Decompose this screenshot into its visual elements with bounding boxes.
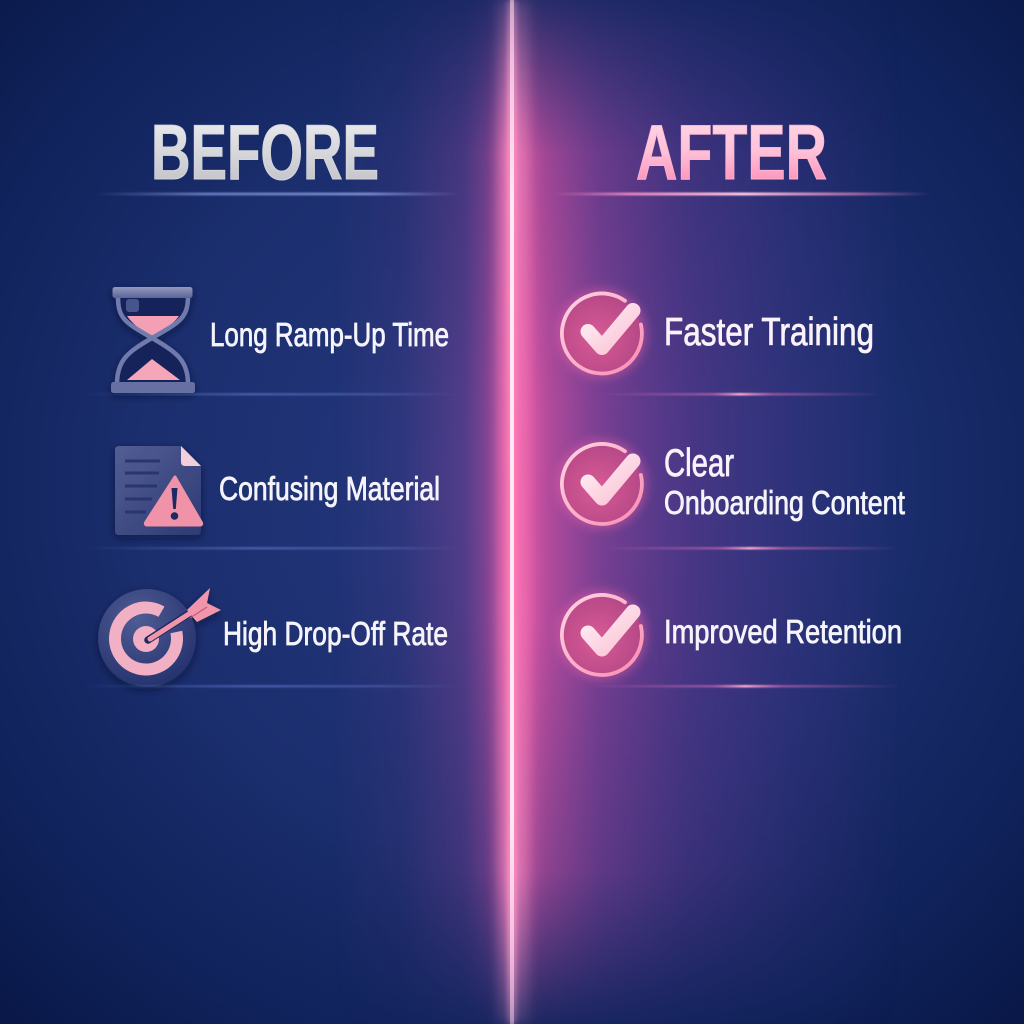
label: confusing material: Confusing Material bbox=[219, 470, 440, 507]
icon: check 1 bbox=[557, 288, 647, 378]
row rule 1 bbox=[600, 393, 880, 396]
heading rule: before bbox=[95, 192, 460, 196]
icon: check 2 bbox=[557, 439, 647, 529]
icon: target with arrow bbox=[98, 588, 221, 687]
row rule 2 bbox=[600, 547, 900, 550]
label: improved retention: Improved Retention bbox=[664, 613, 902, 650]
heading rule: after bbox=[555, 192, 930, 196]
label: clear onboarding content bbox=[664, 442, 905, 521]
central glowing divider bbox=[374, 0, 848, 1024]
panel: before items bbox=[85, 287, 460, 688]
icon: hourglass bbox=[111, 287, 195, 393]
heading: before: BEFORE bbox=[151, 108, 379, 196]
label: clear onboarding content: Onboarding Content bbox=[664, 484, 905, 521]
label: clear onboarding content: Clear bbox=[664, 442, 734, 485]
panel: after items bbox=[557, 288, 905, 688]
row rule 3 bbox=[590, 685, 900, 688]
label: long ramp-up time: Long Ramp-Up Time bbox=[210, 316, 449, 353]
row rule 1 bbox=[85, 393, 460, 396]
heading: after: AFTER bbox=[636, 108, 827, 196]
label: faster training: Faster Training bbox=[664, 311, 874, 354]
row rule 3 bbox=[85, 685, 460, 688]
label: high drop-off rate: High Drop-Off Rate bbox=[223, 615, 448, 652]
icon: check 3 bbox=[557, 590, 647, 680]
row rule 2 bbox=[85, 547, 460, 550]
icon: document with warning bbox=[115, 446, 202, 535]
